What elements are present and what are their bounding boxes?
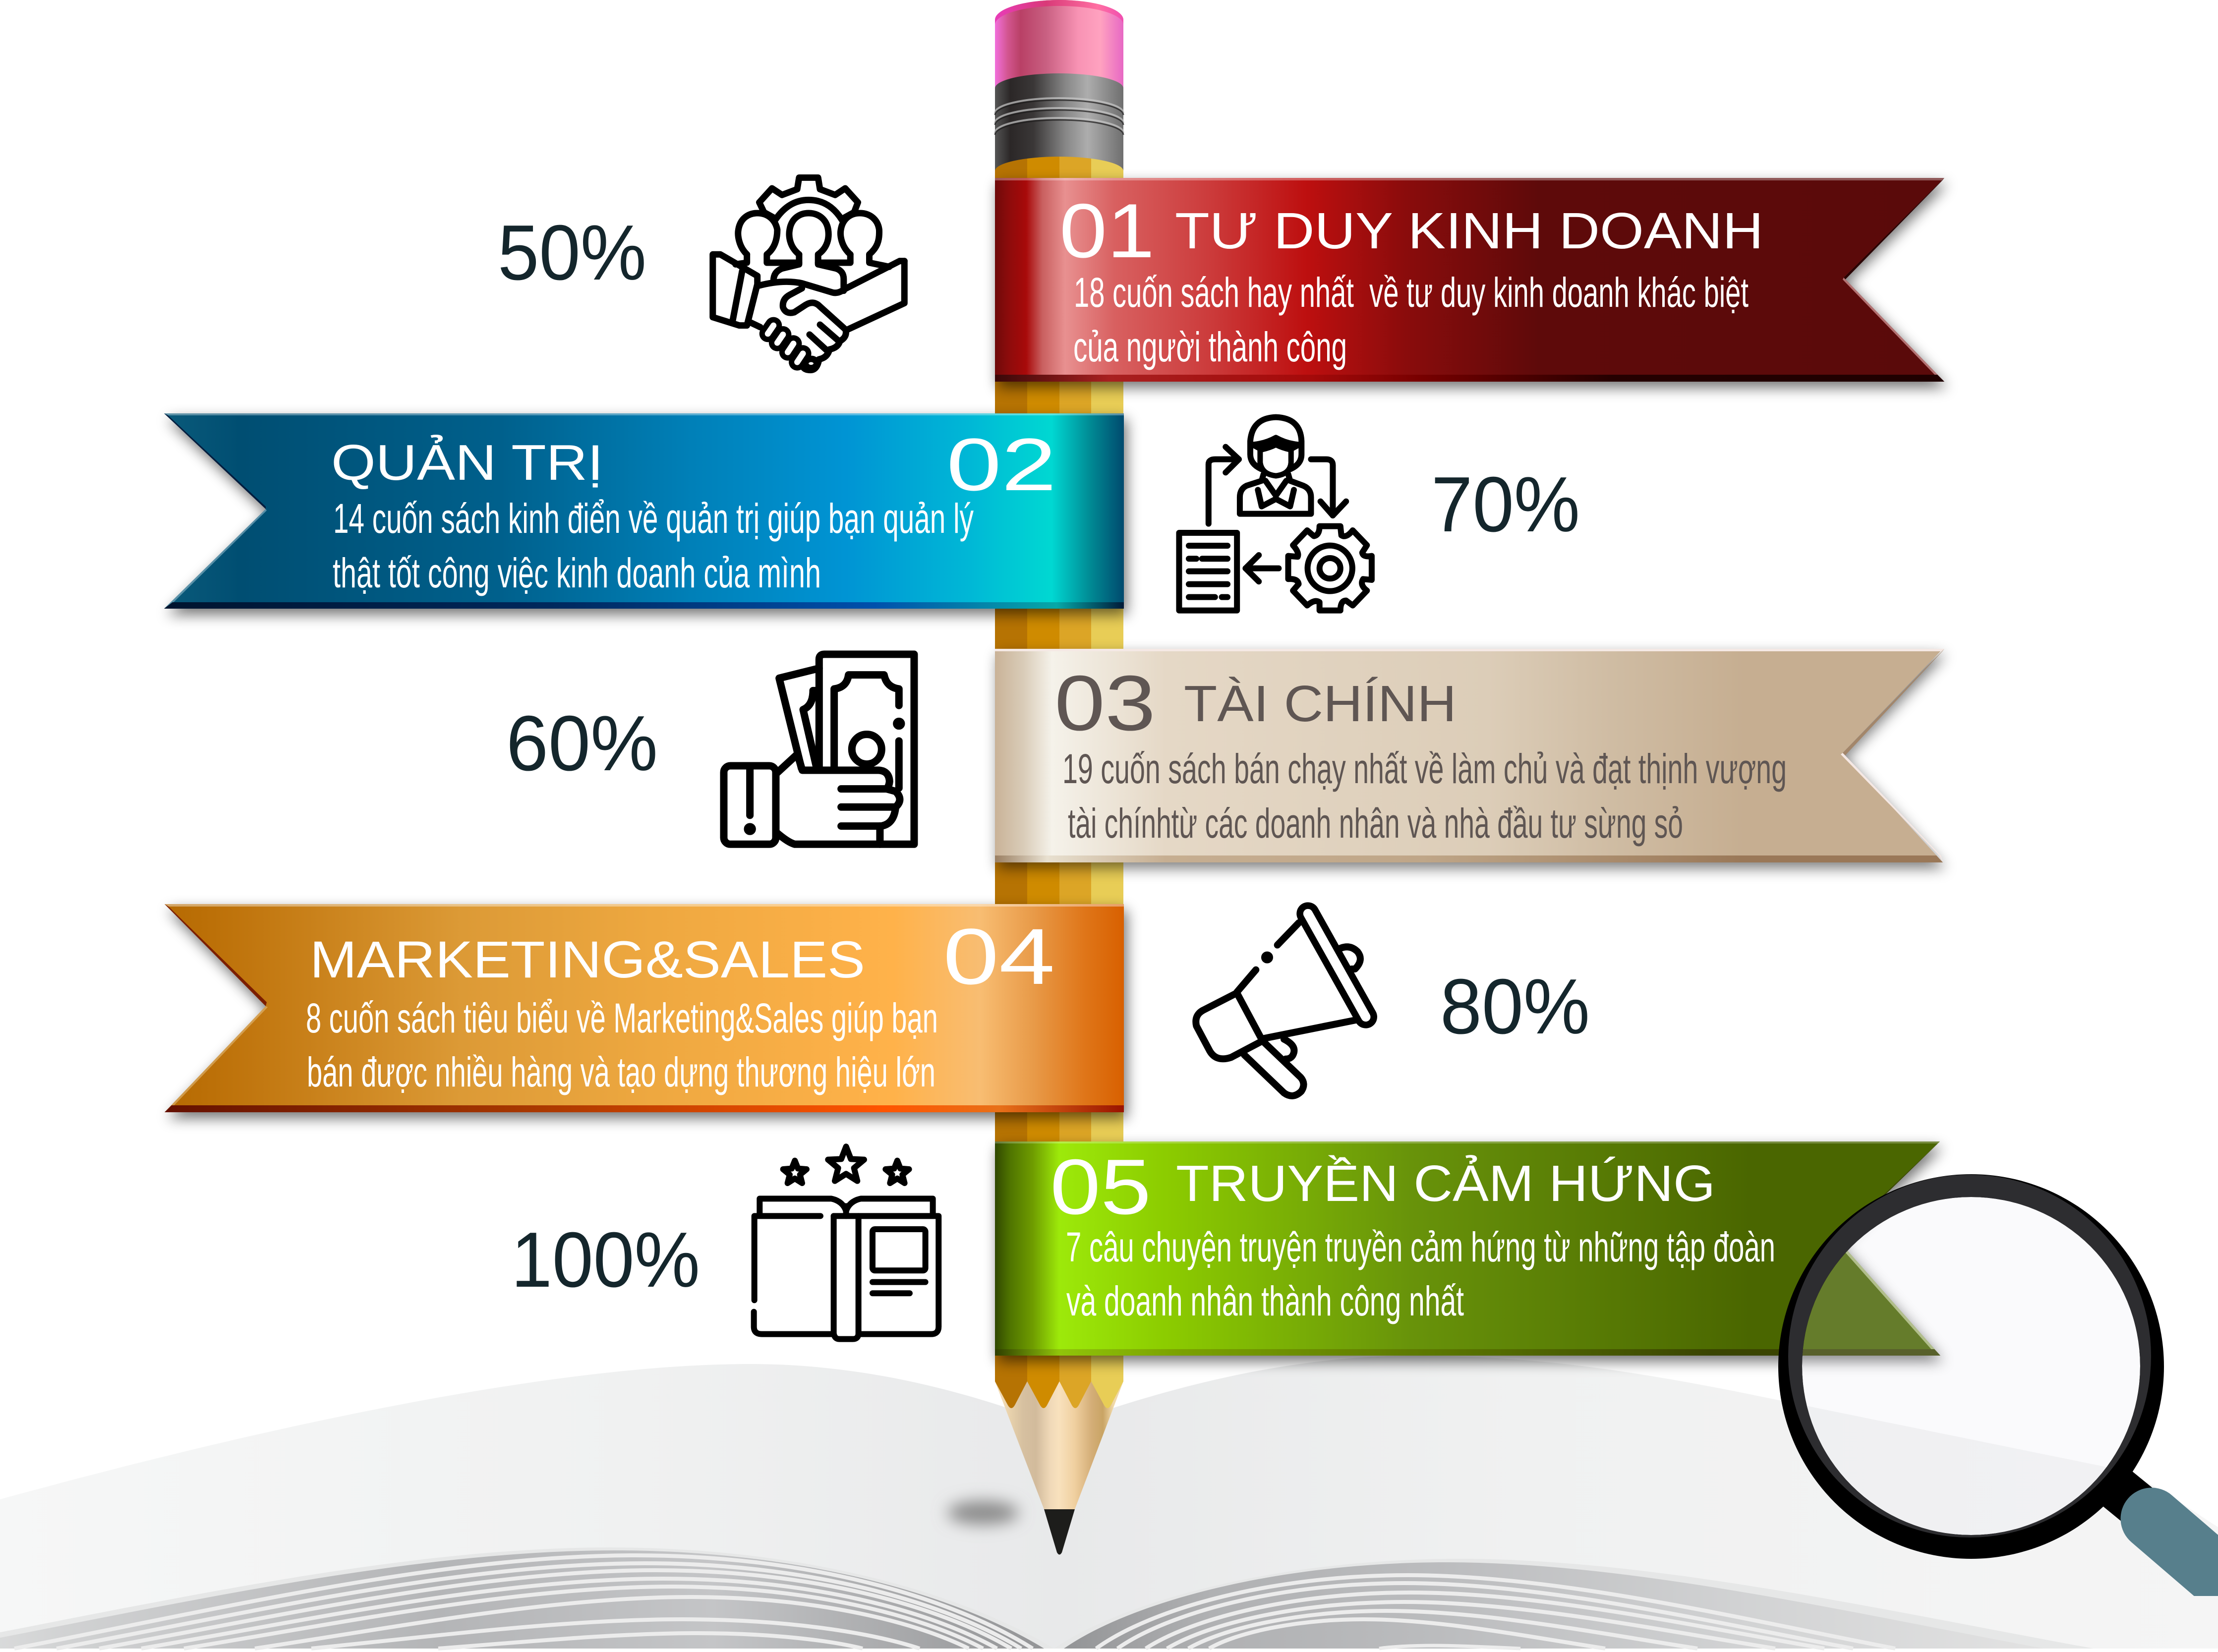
pencil eraser (995, 0, 1123, 208)
pencil (995, 0, 1123, 1554)
frame outer ring (1778, 1174, 2164, 1559)
description line 1: 7 câu chuyện truyện truyền cảm hứng từ những tập đoàn (1066, 1224, 1775, 1270)
ribbon 01 (995, 178, 1947, 388)
description line 2: và doanh nhân thành công nhất (1066, 1278, 1464, 1324)
percentage 60%: 60% (506, 700, 658, 787)
percentage 70%: 70% (1431, 461, 1580, 548)
description line 1: 18 cuốn sách hay nhất về tư duy kinh doanh khác biệt (1074, 269, 1749, 316)
ribbon 04 (165, 904, 1127, 1118)
heading: TÀI CHÍNH (1184, 675, 1457, 732)
description line 1: 8 cuốn sách tiêu biểu về Marketing&Sales giúp bạn (306, 995, 938, 1041)
percentage 50%: 50% (498, 209, 646, 296)
ribbon 03 (995, 649, 1946, 868)
book right page (1059, 1356, 2218, 1649)
pencil body stripes (995, 149, 1123, 1408)
frame inner highlight (1788, 1175, 2151, 1538)
icon: hand holding money (724, 654, 914, 844)
icon: megaphone (1196, 913, 1366, 1096)
lens glass (1802, 1197, 2140, 1535)
icon: person, gear and document cycle (1179, 417, 1372, 611)
right page stack (1054, 1559, 2094, 1649)
description line 2: thật tốt công việc kinh doanh của mình (333, 550, 821, 596)
number 03: 03 (1054, 660, 1156, 747)
icon: handshake with team and gear (713, 177, 904, 370)
number 05: 05 (1050, 1143, 1151, 1231)
description line 1: 14 cuốn sách kinh điển về quản trị giúp bạn quản lý (333, 495, 974, 542)
magnifying glass (1778, 1174, 2218, 1612)
heading: TƯ DUY KINH DOANH (1175, 202, 1763, 259)
icon: open book with stars (754, 1146, 938, 1339)
left page stack (0, 1547, 1054, 1649)
description line 2: tài chínhtừ các doanh nhân và nhà đầu tư sừng sỏ (1068, 800, 1683, 847)
book left page (0, 1364, 1059, 1649)
heading: TRUYỀN CẢM HỨNG (1176, 1154, 1715, 1212)
description line 1: 19 cuốn sách bán chạy nhất về làm chủ và đạt thịnh vượng (1062, 745, 1787, 792)
ribbon 02 (164, 413, 1127, 615)
number 02: 02 (946, 423, 1056, 506)
pencil sharpened wood cone (995, 1381, 1123, 1509)
number 04: 04 (943, 912, 1055, 1001)
ribbon 05 (995, 1141, 1943, 1362)
handle neck (2113, 1485, 2167, 1530)
handle grip (2152, 1519, 2218, 1612)
percentage 80%: 80% (1440, 963, 1590, 1050)
heading: QUẢN TRỊ (331, 435, 603, 491)
pencil lead tip (1044, 1509, 1075, 1554)
pencil tip shadow (947, 1501, 1019, 1525)
number 01: 01 (1059, 188, 1155, 274)
percentage 100%: 100% (511, 1216, 700, 1304)
description line 2: bán được nhiều hàng và tạo dựng thương hiệu lớn (307, 1049, 935, 1095)
pencil ferrule (995, 73, 1123, 188)
heading: MARKETING&SALES (310, 931, 865, 989)
open book background (0, 1356, 2218, 1649)
description line 2: của người thành công (1073, 324, 1347, 370)
